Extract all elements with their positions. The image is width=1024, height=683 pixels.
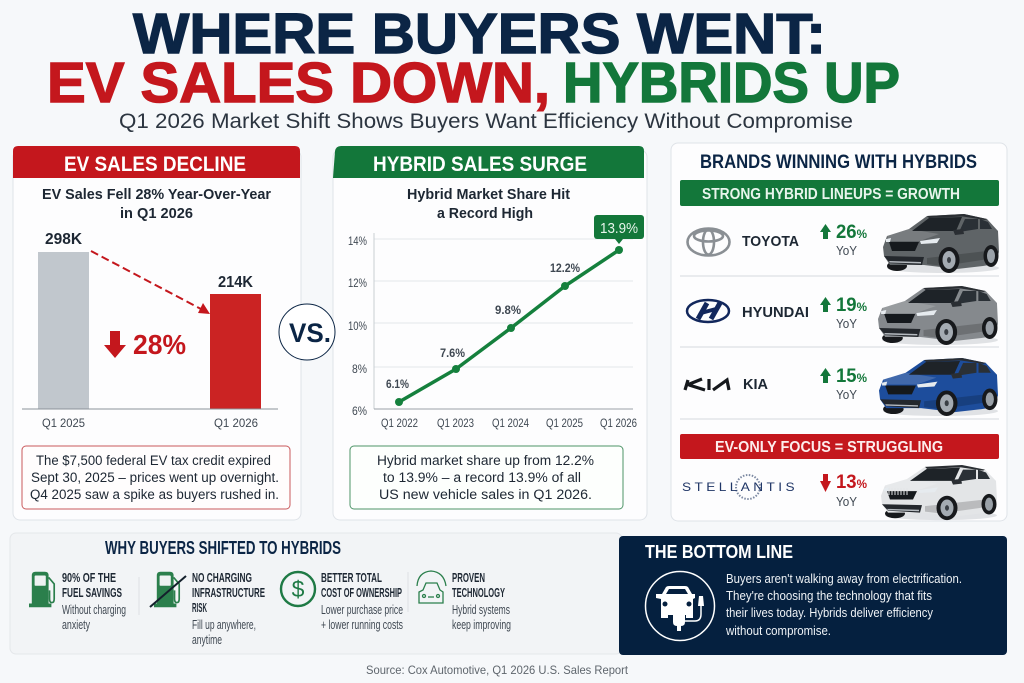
item: proven technology: PROVEN (452, 571, 485, 585)
row: Kia: 15% (836, 366, 867, 387)
text: bottom line message: They're choosing the technology that fits (726, 588, 932, 603)
heading: EV sales decline (13, 146, 300, 178)
item: no charging risk: Fill up anywhere, (192, 618, 256, 632)
car: blue SUV (879, 358, 998, 416)
item: no charging risk: RISK (192, 601, 207, 615)
bar chart (22, 231, 278, 430)
callout: market share (350, 446, 623, 509)
bar chart: Q1 2026 (214, 416, 258, 430)
car: silver SUV (878, 286, 998, 345)
text: bottom line message: Buyers aren't walking away from electrification. (726, 571, 962, 586)
text: bottom line message (725, 571, 962, 638)
badge: VS. (279, 304, 335, 360)
row: Kia: YoY (836, 387, 857, 402)
banner: EV-only focus (680, 434, 999, 459)
chart title: in Q1 2026 (120, 205, 193, 222)
heading: brands: BRANDS WINNING WITH HYBRIDS (700, 152, 977, 173)
chart title: a Record High (437, 205, 533, 222)
icon: Toyota logo (688, 228, 730, 256)
bar chart: Q1 2025 (42, 416, 85, 430)
icon: Stellantis logo (682, 475, 798, 499)
line chart: Q1 2026 (600, 418, 637, 430)
text: bottom line message: without compromise. (725, 623, 831, 638)
car: white SUV (881, 465, 997, 520)
bar chart: 298K (45, 231, 82, 248)
icon: car with plug (646, 572, 714, 640)
item: total cost of ownership: + lower running costs (321, 618, 403, 632)
line chart: Q1 2024 (492, 418, 530, 430)
line chart: 8% (352, 362, 367, 376)
panel: hybrid sales surge (333, 146, 647, 520)
heading: why buyers shifted: WHY BUYERS SHIFTED TO HYBRIDS (105, 538, 341, 558)
item: proven technology: Hybrid systems (452, 603, 510, 617)
icon: fuel pump (29, 572, 54, 607)
callout: tax credit (22, 446, 290, 509)
panel: why buyers shifted (10, 533, 622, 654)
panel: brands winning with hybrids (671, 143, 1007, 521)
title: EV SALES DOWN, (47, 51, 550, 115)
arrow: dashed decline (91, 251, 210, 314)
row: Hyundai: 19% (836, 295, 867, 316)
line chart: 14% (348, 234, 367, 248)
title: HYBRIDS UP (563, 51, 900, 115)
item: no charging risk: INFRASTRUCTURE (192, 586, 265, 600)
row: Kia (685, 358, 998, 416)
row: Hyundai (687, 286, 998, 345)
callout: market share: Hybrid market share up from 12.2% (377, 453, 594, 468)
line chart: 12% (348, 276, 367, 290)
row: Toyota: TOYOTA (742, 233, 799, 250)
line chart: Q1 2025 (546, 418, 583, 430)
item: fuel savings: 90% OF THE (62, 571, 116, 585)
banner: EV-only focus: EV-ONLY FOCUS = STRUGGLING (715, 439, 943, 456)
item: proven technology (417, 571, 511, 632)
subtitle: Q1 2026 Market Shift Shows Buyers Want Efficiency Without Compromise (119, 110, 853, 133)
item: proven technology: keep improving (452, 618, 511, 632)
car: gray SUV (883, 214, 999, 273)
banner: strong hybrid lineups: STRONG HYBRID LINEUPS = GROWTH (702, 186, 960, 203)
row: Stellantis: 13% (836, 472, 867, 493)
row: Hyundai: HYUNDAI (742, 304, 809, 321)
line chart: 6% (352, 404, 367, 418)
row: Hyundai: YoY (836, 316, 857, 331)
callout: market share: US new vehicle sales in Q1 2026. (379, 487, 592, 502)
banner: strong hybrid lineups (680, 180, 999, 206)
callout: market share: to 13.9% – a record 13.9% of all (383, 470, 581, 485)
item: total cost of ownership (281, 571, 403, 632)
panel: EV sales decline (13, 146, 301, 520)
heading: EV sales decline: EV SALES DECLINE (64, 153, 246, 176)
row: Kia: KIA (743, 376, 768, 393)
row: Toyota: 26% (836, 222, 867, 243)
item: proven technology: TECHNOLOGY (452, 586, 505, 600)
badge: 13.9 percent (594, 215, 644, 244)
title (47, 2, 900, 115)
callout: tax credit: Sept 30, 2025 – prices went up overnight. (31, 470, 279, 485)
panel: the bottom line (619, 536, 1007, 655)
line chart: Q1 2023 (437, 418, 474, 430)
line chart: 10% (348, 319, 367, 333)
icon: crossed-out charger (150, 572, 186, 607)
line chart: 12.2% (550, 261, 580, 275)
item: total cost of ownership: COST OF OWNERSHIP (321, 586, 402, 600)
chart title (407, 186, 570, 222)
chart title (42, 186, 271, 222)
bar chart: 214K (218, 274, 253, 291)
stat: down 28 percent: 28% (133, 329, 186, 360)
badge: 13.9 percent: 13.9% (600, 221, 638, 237)
row: Toyota (688, 214, 999, 273)
line chart (348, 233, 637, 430)
row: Toyota: YoY (836, 243, 857, 258)
item: fuel savings: anxiety (62, 618, 91, 632)
item: fuel savings (29, 571, 126, 632)
chart title: EV Sales Fell 28% Year-Over-Year (42, 186, 271, 203)
line chart: 6.1% (386, 377, 409, 391)
item: fuel savings: FUEL SAVINGS (62, 586, 122, 600)
item: total cost of ownership: Lower purchase price (321, 603, 403, 617)
row: Stellantis (682, 465, 997, 520)
line chart: Q1 2022 (381, 418, 418, 430)
text: bottom line message: their lives today. Hybrids deliver efficiency (726, 605, 933, 620)
icon: dollar circle: $ (292, 576, 305, 602)
heading: hybrid sales surge (333, 146, 644, 178)
item: no charging risk: anytime (192, 633, 222, 647)
item: total cost of ownership: BETTER TOTAL (321, 571, 382, 585)
icon: Hyundai logo (687, 300, 729, 322)
icon: car with arc (417, 571, 446, 603)
source note: Source: Cox Automotive, Q1 2026 U.S. Sales Report (366, 663, 629, 677)
row: Stellantis: YoY (836, 494, 857, 509)
title: WHERE BUYERS WENT: (133, 2, 826, 66)
chart title: Hybrid Market Share Hit (407, 186, 570, 203)
item: no charging risk (150, 571, 265, 647)
line chart: 9.8% (495, 303, 521, 317)
callout: tax credit: The $7,500 federal EV tax credit expired (36, 453, 271, 468)
heading: hybrid sales surge: HYBRID SALES SURGE (373, 153, 587, 176)
icon: Kia logo (685, 379, 729, 390)
icon: Stellantis logo: STELLANTIS (682, 480, 798, 494)
item: no charging risk: NO CHARGING (192, 571, 252, 585)
heading: the bottom line: THE BOTTOM LINE (645, 542, 793, 562)
badge: VS.: VS. (289, 318, 331, 348)
callout: tax credit: Q4 2025 saw a spike as buyers rushed in. (30, 487, 279, 502)
stat: down 28 percent (104, 329, 186, 360)
line chart: 7.6% (440, 346, 465, 360)
item: fuel savings: Without charging (62, 603, 126, 617)
